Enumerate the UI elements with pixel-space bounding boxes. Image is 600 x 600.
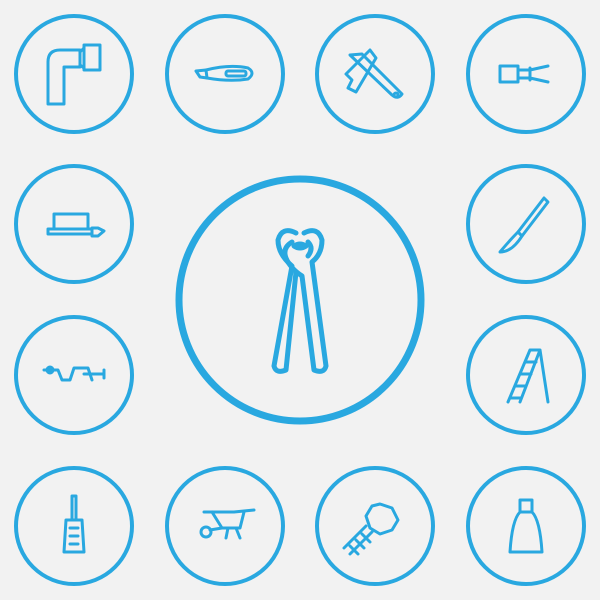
icon: wheelbarrow — [167, 468, 283, 584]
icon: crossed tools — [317, 16, 433, 132]
icon: dustpan — [468, 468, 584, 584]
icon: pipe elbow — [16, 16, 132, 132]
icon: spatula — [16, 468, 132, 584]
icon: utility knife — [167, 16, 283, 132]
icon: screw — [317, 468, 433, 584]
icon: brace drill — [16, 317, 132, 433]
icon: wire stripper — [468, 16, 584, 132]
icon: hacksaw — [16, 166, 132, 282]
icon: scalpel — [468, 166, 584, 282]
icon: pliers (center) — [179, 179, 421, 421]
icon: ladder — [468, 317, 584, 433]
